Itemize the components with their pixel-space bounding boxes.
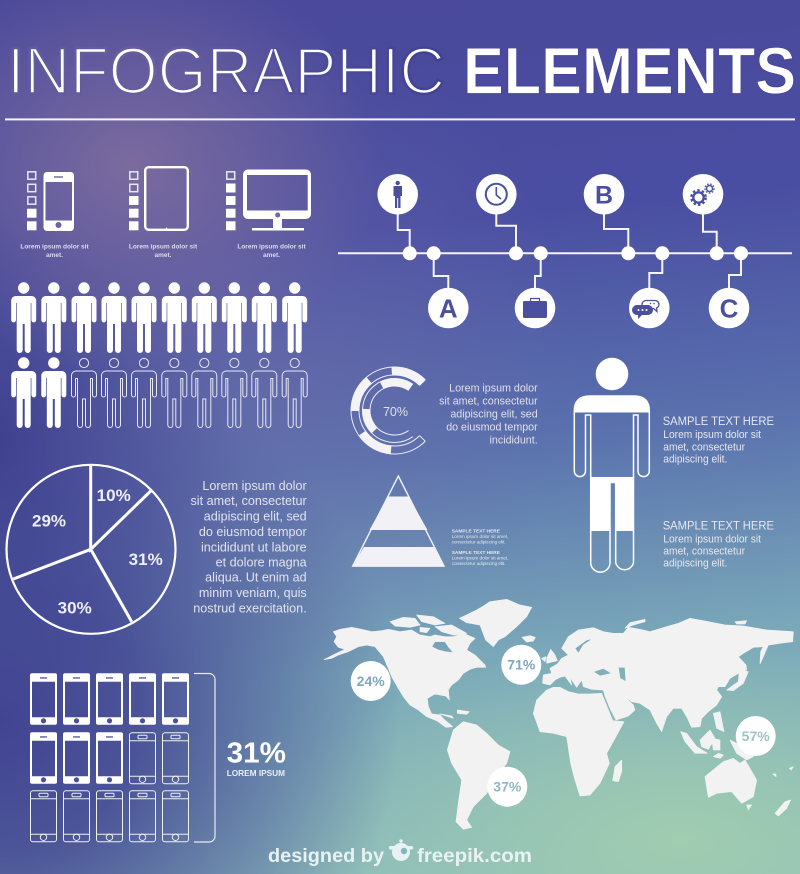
- Africa: [533, 687, 624, 796]
- radial chart text: adipiscing elit, sed: [450, 408, 538, 420]
- pie labels: [32, 486, 163, 617]
- icon: letter A: [428, 288, 469, 328]
- person text: lower: Lorem ipsum dolor sit: [663, 534, 761, 546]
- pie chart text: minim veniam, quis: [199, 586, 307, 600]
- icon: briefcase: [515, 288, 555, 328]
- device captions: Lorem ipsum dolor sit: [20, 244, 89, 250]
- person text: lower: SAMPLE TEXT HERE: [663, 518, 774, 532]
- pie chart text: do eiusmod tempor: [199, 525, 307, 539]
- person text: upper: amet, consectetur: [663, 441, 745, 453]
- pie chart text: [190, 479, 307, 615]
- South America: [447, 722, 510, 829]
- title: INFOGRAPHIC: [7, 33, 445, 107]
- icon: letter C: [709, 288, 749, 328]
- footer credit: designed by: [268, 846, 384, 867]
- Eurasia: [543, 618, 793, 732]
- pyramid chart: [352, 476, 444, 567]
- pie chart text: sit amet, consectetur: [190, 494, 307, 508]
- Caribbean: [440, 710, 469, 718]
- icon: letter B: B: [595, 182, 613, 210]
- device captions: amet.: [155, 252, 172, 259]
- Greenland: [459, 599, 532, 647]
- pie chart text: Lorem ipsum dolor: [202, 479, 307, 493]
- map markers: 71%: [507, 657, 536, 673]
- radial chart text: sit amet, consectetur: [439, 395, 538, 407]
- pie chart text: aliqua. Ut enim ad: [205, 571, 307, 585]
- New Zealand: [773, 767, 793, 816]
- device usage panel: [20, 167, 311, 259]
- person text: upper: adipiscing elit.: [663, 453, 727, 465]
- bracket: [194, 674, 215, 842]
- phones pictogram: [30, 673, 189, 842]
- icon: letter A: A: [439, 294, 458, 324]
- radial chart text: [439, 382, 538, 446]
- icon: letter B: [584, 174, 624, 215]
- pie chart: [6, 465, 176, 634]
- British Isles: [542, 649, 557, 663]
- title: [7, 33, 796, 107]
- map markers: 24%: [357, 673, 385, 689]
- pyramid text: SAMPLE TEXT HERE: [452, 528, 501, 534]
- map markers: 37%: [493, 779, 522, 795]
- world map: [324, 599, 793, 829]
- person text: lower: [663, 518, 774, 570]
- pie labels: 31%: [129, 550, 163, 569]
- pyramid text: consectetur adipiscing elit.: [452, 540, 506, 544]
- pie labels: 29%: [32, 512, 66, 531]
- phones stat: LOREM IPSUM: [227, 768, 285, 778]
- icon: person: [377, 174, 418, 215]
- footer credit: freepik.com: [417, 846, 532, 867]
- icon: clock: [476, 174, 517, 215]
- device captions: Lorem ipsum dolor sit: [129, 244, 198, 250]
- device captions: amet.: [46, 252, 63, 259]
- radial progress chart: [333, 349, 456, 472]
- icon: monitor with checklist: [226, 170, 311, 230]
- Southeast Asia islands: [681, 712, 753, 760]
- icon: chat bubbles: [629, 288, 670, 328]
- pie chart text: incididunt ut labore: [201, 540, 307, 554]
- pyramid text: SAMPLE TEXT HERE: [452, 550, 501, 556]
- timeline: [338, 174, 792, 328]
- Iceland: [522, 636, 535, 642]
- pyramid text: Lorem ipsum dolor sit amet,: [452, 534, 508, 539]
- phones stat: 31%: [227, 738, 286, 770]
- North America: [324, 627, 486, 727]
- people pictogram: [11, 282, 307, 428]
- pyramid text: Lorem ipsum dolor sit amet,: [452, 555, 508, 560]
- person text: lower: adipiscing elit.: [663, 558, 727, 570]
- device captions: Lorem ipsum dolor sit: [237, 244, 306, 250]
- radial chart text: do eiusmod tempor: [446, 421, 538, 433]
- icon: freepik mascot: [389, 839, 413, 861]
- Canadian Arctic islands: [390, 615, 467, 635]
- radial chart text: incididunt.: [490, 434, 538, 446]
- map markers: [351, 645, 776, 807]
- icon: gears: [683, 174, 723, 215]
- Madagascar: [613, 760, 622, 782]
- pyramid text: consectetur adipiscing elit.: [452, 561, 506, 566]
- map markers: 57%: [742, 728, 770, 744]
- icon: letter C: C: [720, 294, 739, 324]
- device captions: amet.: [263, 252, 280, 259]
- icon: phone with checklist: [27, 172, 74, 231]
- footer credit: [268, 839, 532, 867]
- pie labels: 30%: [58, 598, 92, 617]
- icon: tablet with checklist: [129, 167, 188, 230]
- pie chart text: adipiscing elit, sed: [204, 510, 307, 524]
- radial chart text: Lorem ipsum dolor: [449, 382, 538, 394]
- person text: upper: Lorem ipsum dolor sit: [663, 429, 761, 441]
- pie chart text: nostrud exercitation.: [193, 601, 307, 615]
- pyramid text: [452, 528, 508, 566]
- Japan: [727, 670, 748, 691]
- pie chart text: et dolore magna: [216, 556, 307, 570]
- person text: lower: amet, consectetur: [663, 546, 745, 558]
- pie labels: 10%: [97, 486, 131, 505]
- person text: upper: [663, 414, 774, 465]
- chart value: 70%: [383, 405, 408, 419]
- device captions: [20, 244, 306, 259]
- Australia: [705, 758, 757, 810]
- large person figure: [574, 358, 649, 572]
- Russian Arctic islands: [625, 619, 747, 628]
- person text: upper: SAMPLE TEXT HERE: [663, 414, 774, 428]
